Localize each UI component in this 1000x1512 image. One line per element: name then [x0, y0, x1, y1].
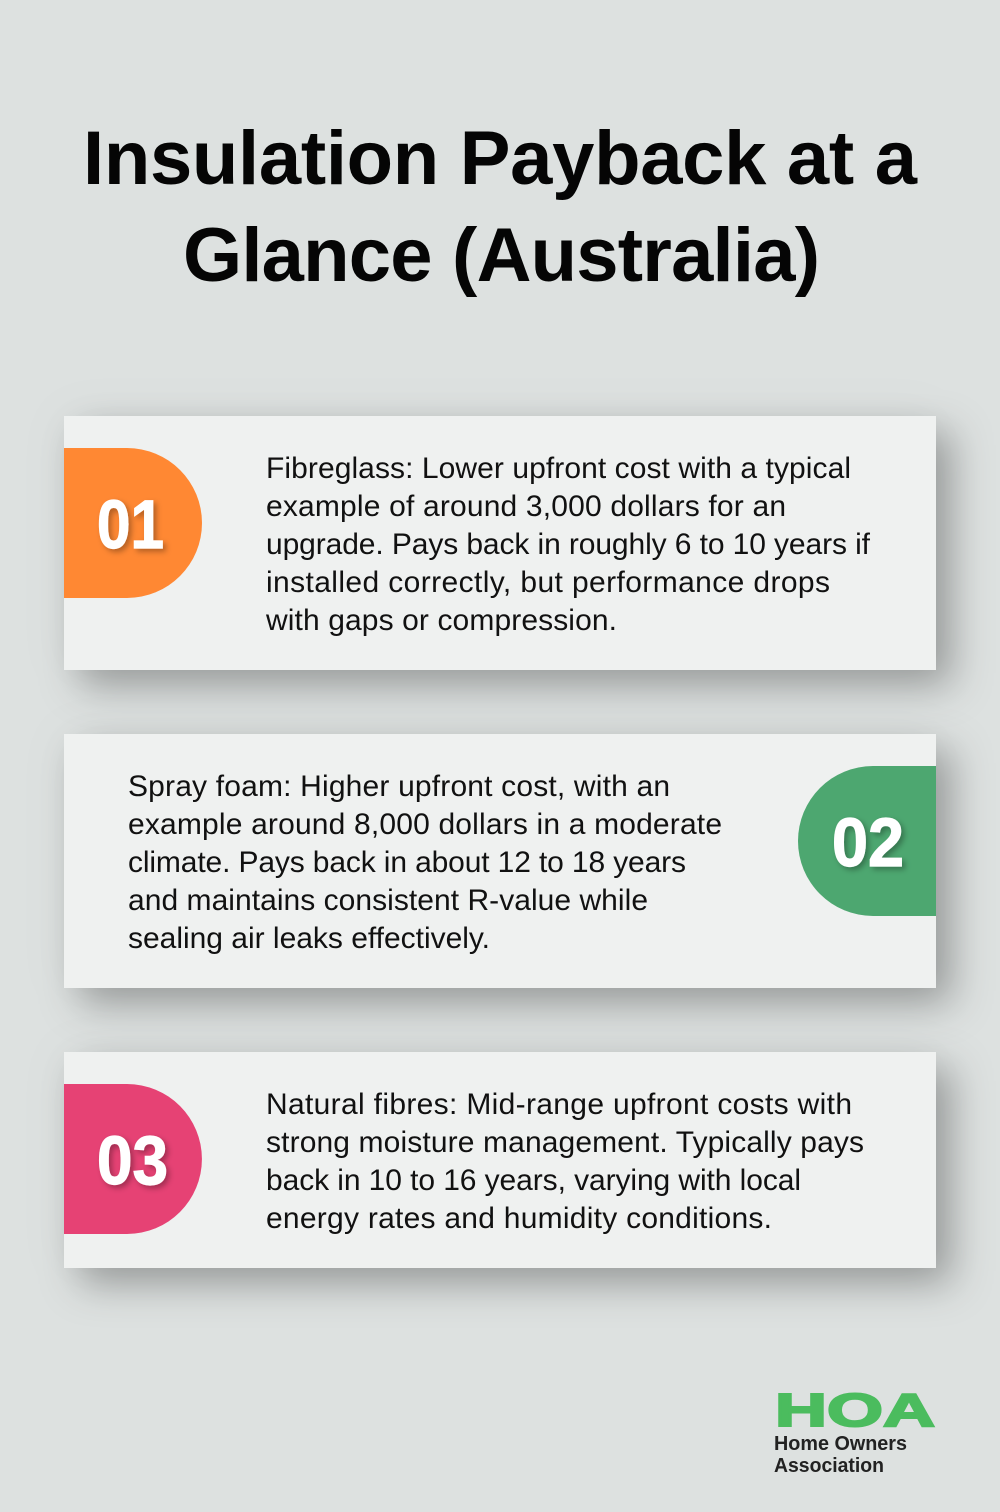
panel: fibreglass: [64, 416, 936, 670]
text: spray foam: example around 8,000 dollars in a moderate: [128, 808, 722, 841]
badge 03: 03: [97, 1122, 168, 1199]
title: [83, 116, 918, 298]
panel: spray foam: [64, 734, 936, 988]
text: natural fibres: strong moisture management. Typically pays: [266, 1126, 864, 1159]
card background 1: [64, 416, 936, 670]
badge 02: [798, 766, 936, 916]
text: spray foam: and maintains consistent R-value while: [128, 884, 648, 917]
text: fibreglass: example of around 3,000 dollars for an: [266, 490, 786, 523]
panel: natural fibres: [64, 1052, 936, 1268]
logo: HOA: HOA: [775, 1384, 935, 1436]
text: fibreglass: upgrade. Pays back in roughly 6 to 10 years if: [266, 528, 871, 561]
badge 01: [64, 448, 202, 598]
text: fibreglass: [265, 452, 871, 637]
logo: HOA: [774, 1384, 935, 1477]
text: fibreglass: installed correctly, but performance drops: [266, 566, 830, 599]
text: spray foam: climate. Pays back in about 12 to 18 years: [128, 846, 686, 879]
badge 01: 01: [97, 486, 164, 563]
logo: HOA: Home Owners: [774, 1433, 907, 1455]
title: Glance (Australia): [183, 213, 820, 298]
badge 02: 02: [832, 804, 904, 881]
title: Insulation Payback at a: [83, 116, 918, 201]
card background 3: [64, 1052, 936, 1268]
card background 2: [64, 734, 936, 988]
text: spray foam: [128, 770, 722, 955]
text: fibreglass: Fibreglass: Lower upfront cost with a typical: [266, 452, 851, 485]
logo: HOA: Association: [774, 1455, 884, 1477]
text: natural fibres: energy rates and humidity conditions.: [266, 1202, 772, 1235]
text: natural fibres: [266, 1088, 864, 1235]
text: natural fibres: Natural fibres: Mid-range upfront costs with: [266, 1088, 852, 1121]
text: fibreglass: with gaps or compression.: [265, 604, 617, 637]
text: natural fibres: back in 10 to 16 years, varying with local: [266, 1164, 801, 1197]
text: spray foam: sealing air leaks effectively.: [128, 922, 490, 955]
badge 03: [64, 1084, 202, 1234]
text: spray foam: Spray foam: Higher upfront cost, with an: [128, 770, 670, 803]
